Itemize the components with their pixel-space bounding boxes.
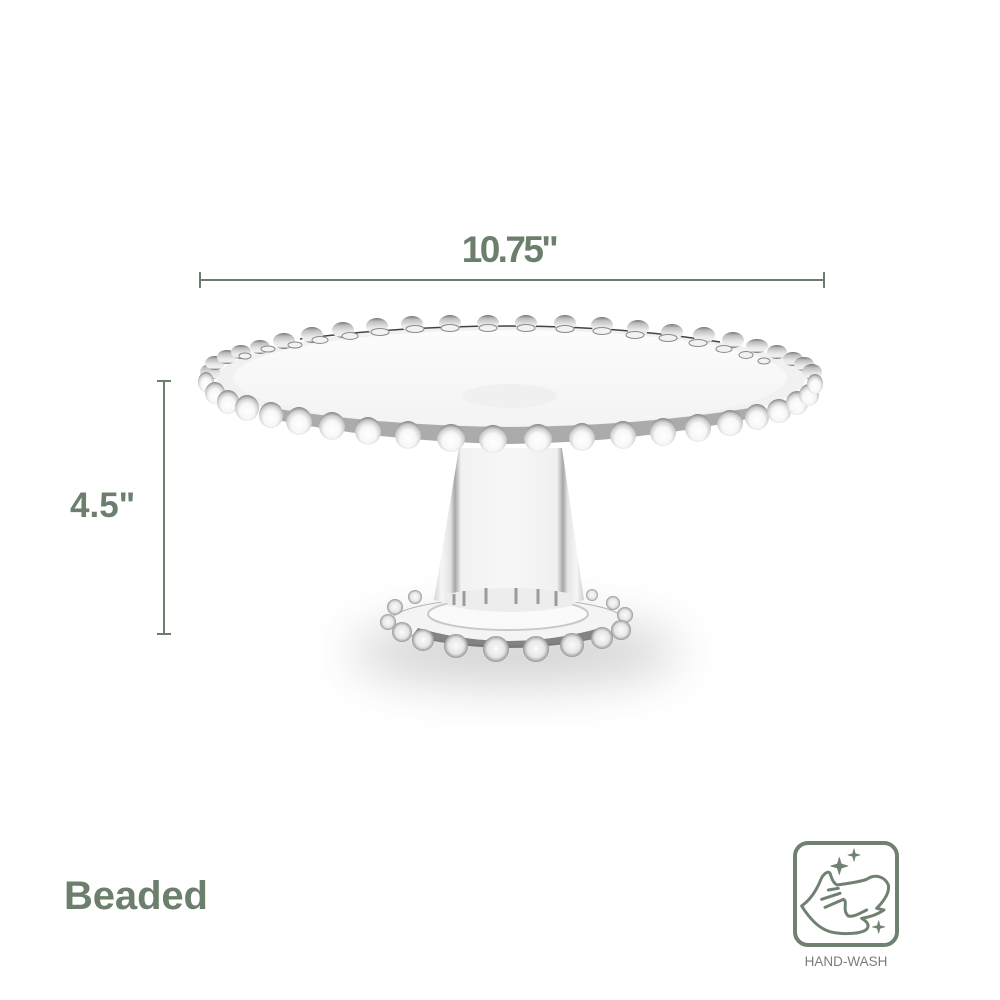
product name: Beaded: [64, 874, 208, 918]
dimension: width 10.75 inches: [200, 229, 824, 288]
icon: fingers: [822, 888, 867, 916]
front row beads: [198, 372, 823, 453]
icon: hand wash: [795, 843, 897, 945]
product photo: beaded glass cake stand: [198, 315, 823, 662]
icon: hand outline: [802, 872, 889, 934]
rim band between front beads: [262, 407, 752, 444]
icon caption: HAND-WASH: [805, 954, 887, 969]
cake stand drop shadow: [350, 618, 680, 686]
dimension: height 4.5 inches: [70, 381, 171, 634]
back row beads: [200, 315, 822, 380]
stem seen through plate: [463, 384, 557, 408]
dimension: width 10.75 inches: 10.75": [462, 229, 557, 270]
plate surface: [233, 330, 787, 426]
icon: sparkles: [831, 849, 885, 933]
inner row beads: [239, 324, 770, 364]
stand stem: [434, 448, 584, 612]
back rim line: [300, 326, 720, 342]
dimension: height 4.5 inches: 4.5": [70, 486, 135, 525]
stand foot with beads: [380, 589, 633, 662]
plate rim glass ring: [217, 326, 805, 432]
